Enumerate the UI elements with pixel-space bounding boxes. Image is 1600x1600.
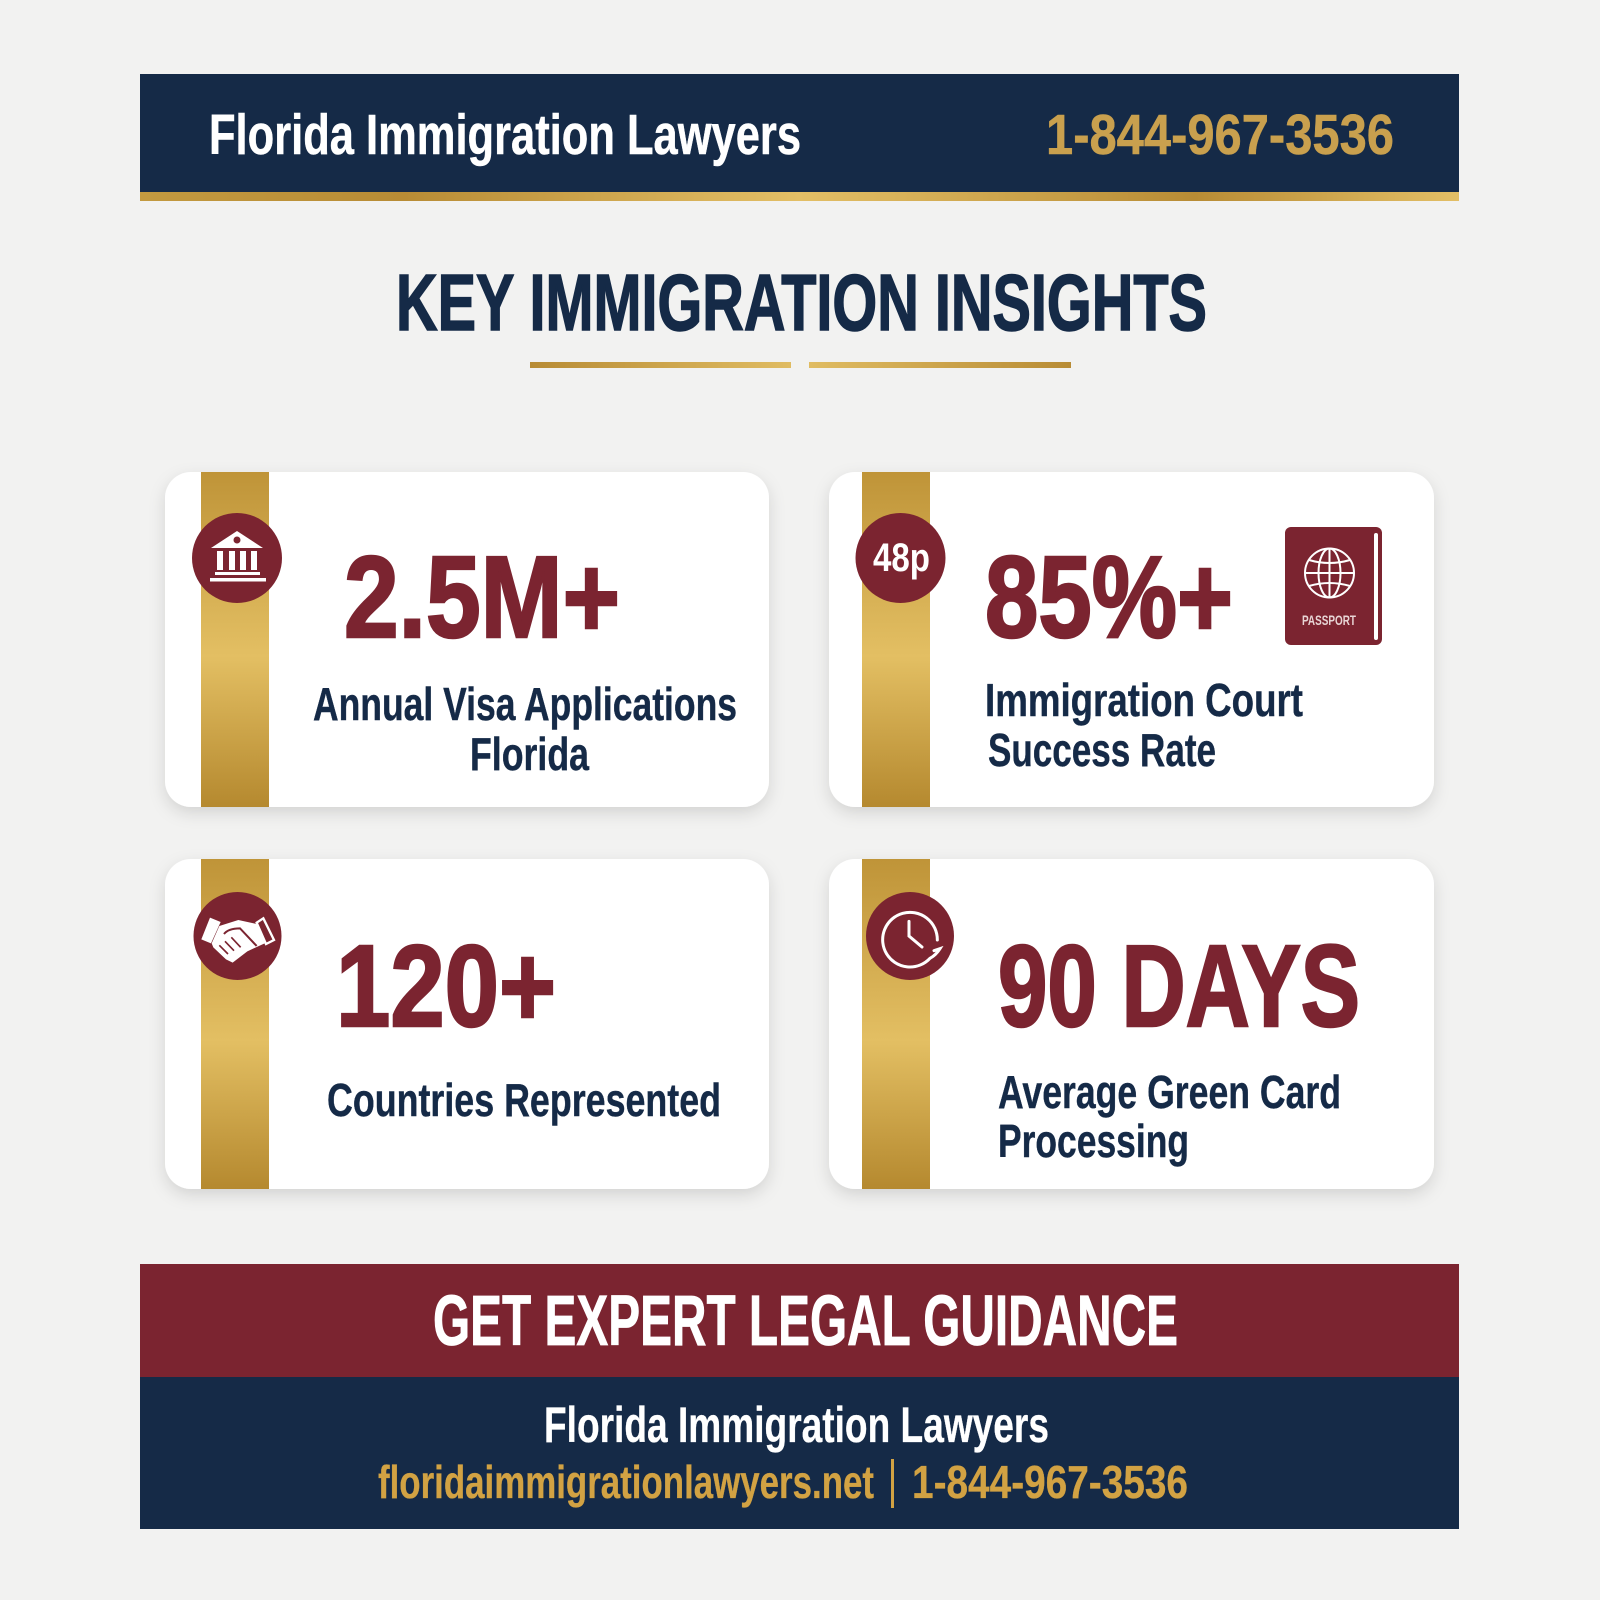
label: immigration court success rate: Immigration Court: [985, 674, 1303, 726]
panel: green card processing: [829, 859, 1434, 1189]
header firm name: Florida Immigration Lawyers: [209, 103, 801, 167]
footer phone number: 1-844-967-3536: [912, 1456, 1188, 1508]
label: immigration court success rate: [985, 674, 1303, 776]
panel: countries represented: [165, 859, 769, 1189]
label: countries represented: Countries Represented: [327, 1074, 721, 1126]
statistic: 85%+: 85%+: [985, 532, 1233, 662]
icon: courthouse: [192, 513, 282, 603]
call to action banner: [140, 1264, 1459, 1529]
icon: handshake: [194, 892, 282, 980]
footer divider: [891, 1459, 894, 1508]
header phone number: 1-844-967-3536: [1046, 103, 1394, 167]
icon: 48p badge: 48p: [873, 536, 930, 580]
label: annual visa applications: Annual Visa Applications: [313, 678, 737, 730]
statistic: 120+: 120+: [336, 921, 556, 1051]
label: average green card processing: Processing: [998, 1115, 1189, 1167]
label: average green card processing: Average Green Card: [998, 1066, 1341, 1118]
label: immigration court success rate: Success Rate: [988, 724, 1216, 776]
footer firm name: Florida Immigration Lawyers: [544, 1397, 1049, 1453]
label: average green card processing: [998, 1066, 1341, 1167]
statistic: 90 days: 90 DAYS: [998, 921, 1360, 1051]
panel: court success rate: [829, 472, 1434, 807]
statistic: 2.5M+: 2.5M+: [344, 532, 620, 662]
title underline: [530, 362, 1071, 368]
header banner: [140, 74, 1459, 201]
call to action heading: GET EXPERT LEGAL GUIDANCE: [433, 1282, 1178, 1361]
footer website: floridaimmigrationlawyers.net: [378, 1456, 874, 1508]
panel: visa applications: [165, 472, 769, 807]
icon: passport: [1285, 527, 1382, 645]
label: annual visa applications: Florida: [470, 728, 589, 780]
main title: KEY IMMIGRATION INSIGHTS: [396, 258, 1207, 347]
label: annual visa applications: [313, 678, 737, 780]
icon: 48p badge: [856, 513, 946, 603]
icon: clock: [866, 892, 954, 980]
icon: passport: PASSPORT: [1302, 612, 1356, 628]
